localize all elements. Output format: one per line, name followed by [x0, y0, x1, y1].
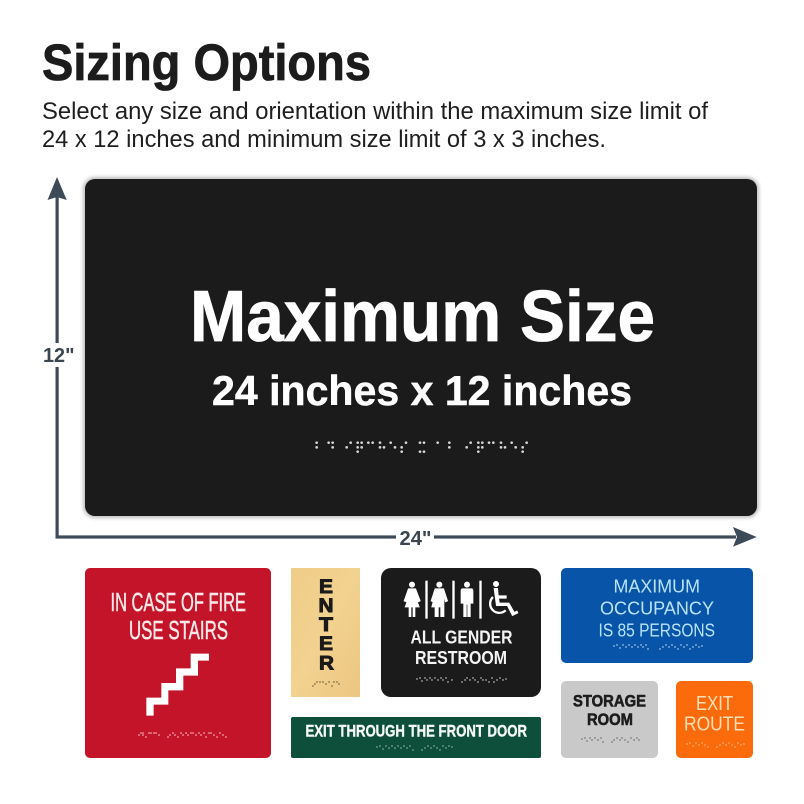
text: use stairs: USE STAIRS	[129, 615, 228, 645]
icon: wheelchair	[490, 581, 518, 616]
panel: maximum occupancy sign	[561, 568, 753, 663]
icon: man	[461, 582, 473, 617]
text: storage room: ROOM	[587, 710, 633, 729]
text: storage room: STORAGE	[573, 692, 646, 710]
icon: gender neutral figure	[431, 582, 448, 617]
braille: exit route sign	[687, 743, 744, 747]
text: enter vertical: E	[319, 576, 333, 598]
label: 12 inch height: 12"	[43, 344, 74, 367]
icon: woman	[404, 582, 420, 617]
subtitle text	[42, 98, 708, 153]
panel: storage room sign	[561, 681, 658, 758]
panel: all gender restroom sign	[381, 568, 541, 697]
text: enter vertical: T	[319, 614, 333, 636]
label: 24 inch width: 24"	[400, 527, 432, 550]
panel: enter sign	[291, 568, 360, 697]
subtitle text: Select any size and orientation within the maximum size limit of	[42, 98, 708, 125]
braille: fire sign	[139, 733, 226, 737]
heading: maximum size: Maximum Size	[190, 277, 655, 357]
braille: green sign	[377, 746, 452, 750]
icon: stairs	[146, 654, 209, 716]
text: maximum occupancy: OCCUPANCY	[600, 598, 714, 618]
arrow: horizontal width dimension	[56, 527, 757, 547]
braille: maximum size sign	[315, 441, 528, 453]
panel: maximum size sign	[84, 178, 758, 518]
text: storage room	[573, 692, 646, 729]
text: maximum occupancy: MAXIMUM	[614, 577, 700, 597]
text: enter vertical: N	[318, 595, 334, 617]
text: all gender: ALL GENDER	[410, 626, 512, 648]
panel: exit through the front door sign	[291, 717, 541, 758]
text: dimensions: 24 inches x 12 inches	[212, 367, 632, 414]
panel: fire stairs sign	[85, 568, 271, 758]
title: Sizing Options	[42, 34, 371, 91]
text: maximum occupancy: IS 85 PERSONS	[598, 620, 715, 640]
braille: occupancy sign	[614, 645, 702, 649]
text: exit through the front door: EXIT THROUGH THE FRONT DOOR	[306, 722, 527, 740]
text: exit route: ROUTE	[684, 712, 745, 736]
subtitle text: 24 x 12 inches and minimum size limit of 3 x 3 inches.	[42, 126, 606, 153]
text: maximum occupancy	[598, 577, 715, 640]
panel: exit route sign	[676, 681, 753, 758]
text: enter vertical: R	[319, 652, 334, 674]
text: in case of fire: IN CASE OF FIRE	[110, 587, 246, 617]
arrow: vertical height dimension	[48, 177, 67, 538]
text: exit route: EXIT	[696, 692, 733, 715]
braille: restroom sign	[417, 678, 506, 682]
braille: storage sign	[582, 738, 639, 742]
text: enter vertical: E	[319, 633, 333, 655]
braille: enter sign	[313, 682, 339, 686]
text: exit route	[684, 692, 745, 736]
text: enter vertical	[318, 576, 334, 674]
icon: restroom pictograms	[404, 581, 518, 618]
text: restroom: RESTROOM	[415, 647, 507, 668]
